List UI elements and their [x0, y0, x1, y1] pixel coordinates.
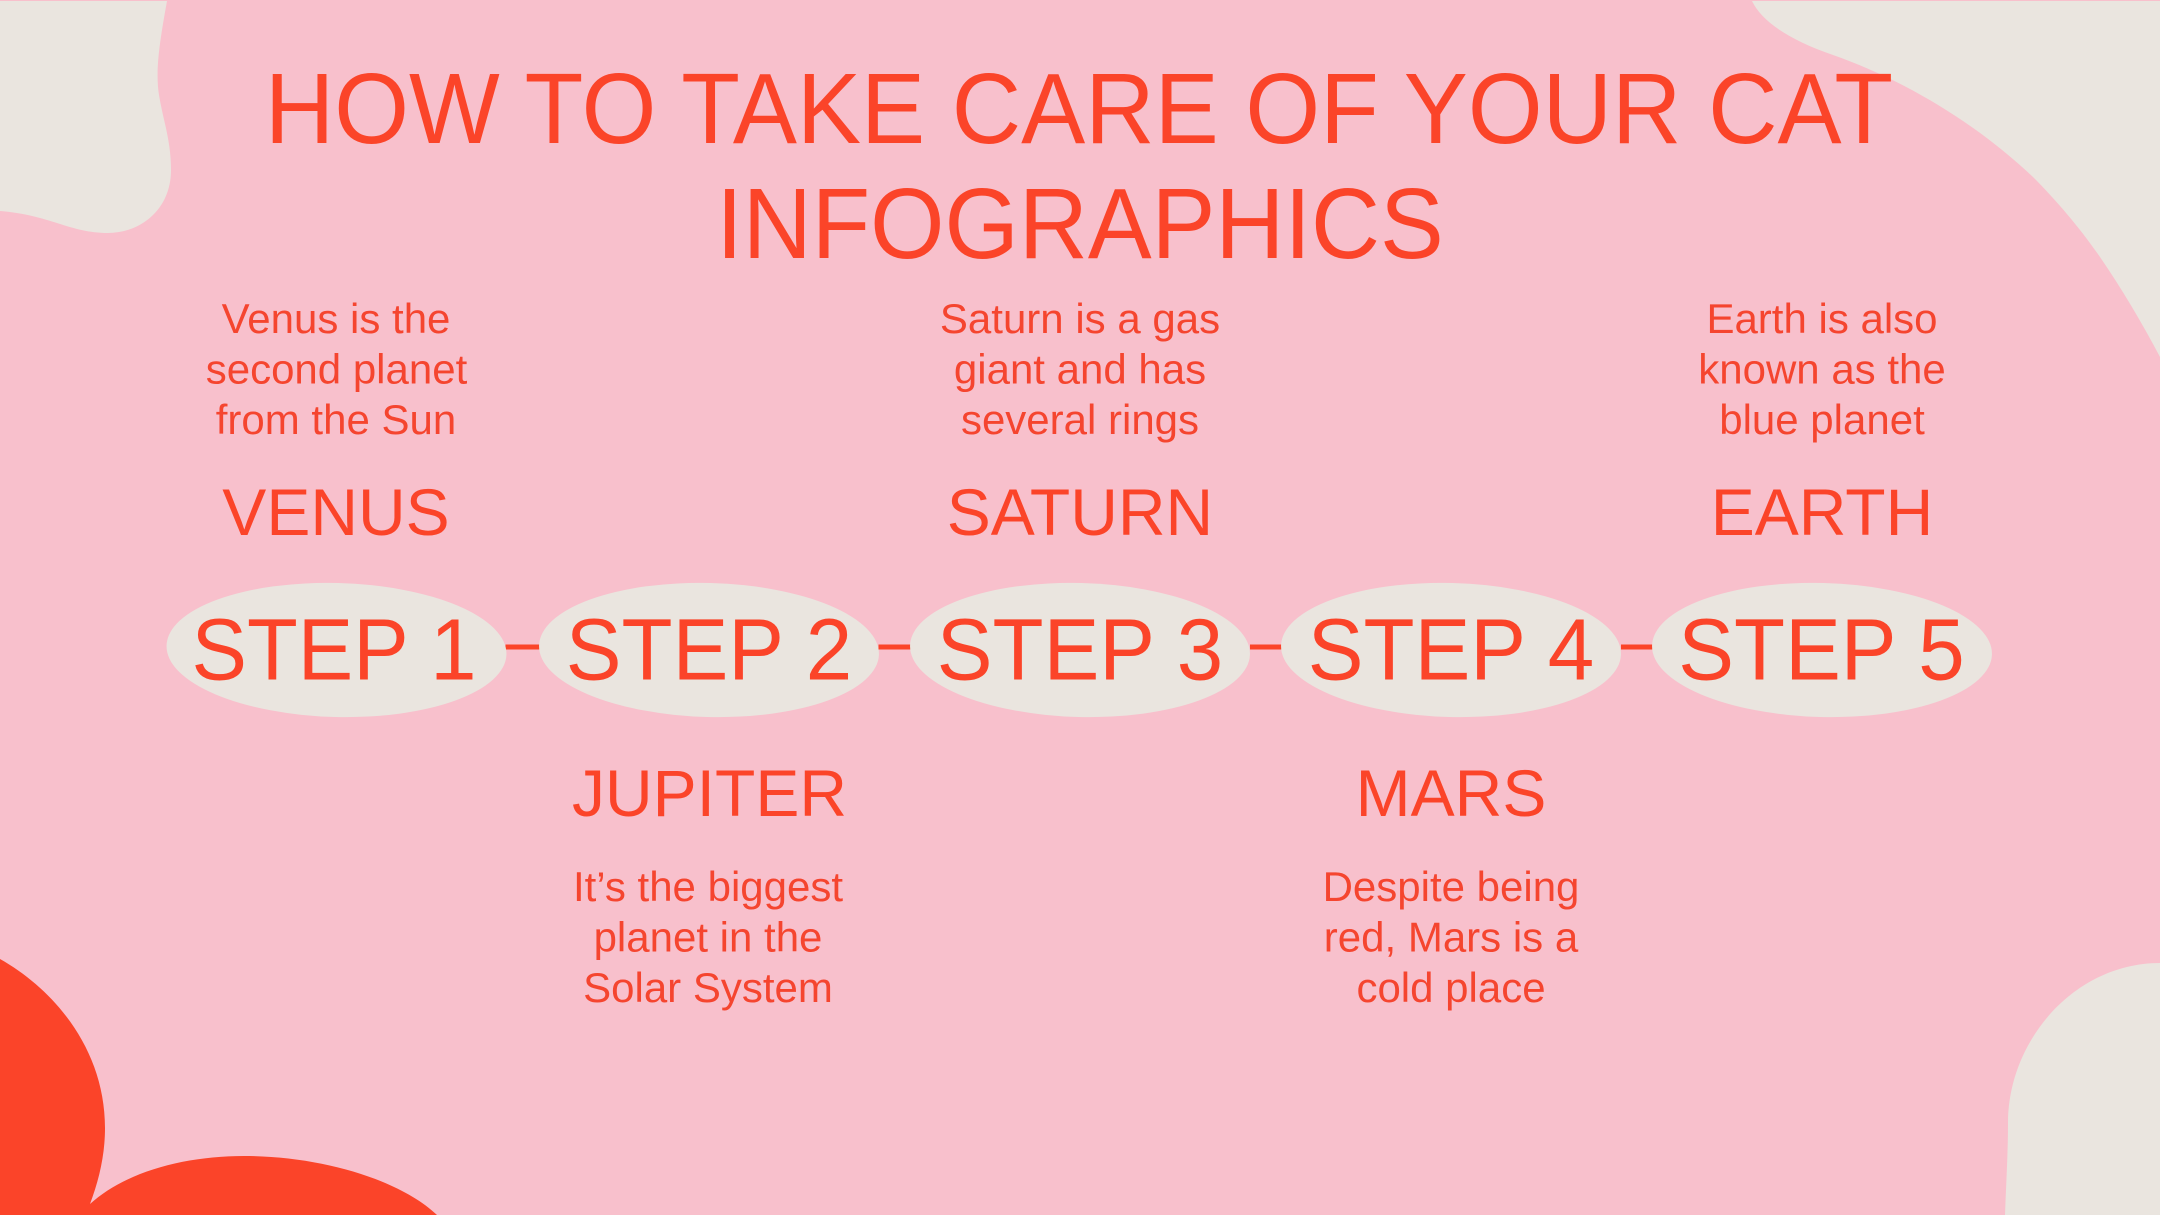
saturn description: [940, 295, 1220, 443]
title: INFOGRAPHICS: [716, 167, 1444, 279]
jupiter description: [573, 863, 843, 1011]
step 2 pill: [537, 579, 881, 721]
venus description: from the Sun: [216, 396, 456, 443]
jupiter description: It’s the biggest: [573, 863, 843, 910]
blob: bottom left red petals: [0, 959, 437, 1215]
step 5 pill: STEP 5: [1678, 602, 1965, 699]
blob: top left: [0, 1, 171, 233]
title: HOW TO TAKE CARE OF YOUR CAT: [265, 52, 1893, 164]
blob: bottom right: [2005, 963, 2160, 1215]
mars description: Despite being: [1323, 863, 1579, 910]
step 4 pill: [1279, 579, 1623, 721]
step 1 pill: [165, 579, 508, 721]
saturn description: giant and has: [954, 346, 1206, 392]
saturn heading: SATURN: [947, 475, 1213, 549]
jupiter description: planet in the: [594, 914, 822, 960]
earth description: blue planet: [1719, 396, 1925, 443]
step 1 pill: STEP 1: [192, 602, 476, 699]
saturn description: several rings: [961, 396, 1199, 443]
earth heading: EARTH: [1711, 475, 1933, 549]
jupiter description: Solar System: [583, 964, 833, 1011]
step 2 pill: STEP 2: [566, 602, 852, 699]
blob: top right: [1752, 1, 2160, 357]
mars heading: MARS: [1356, 756, 1546, 830]
saturn description: Saturn is a gas: [940, 295, 1220, 342]
step 5 pill: [1650, 579, 1994, 721]
connector: step 3 to 4: [1250, 644, 1283, 650]
step 3 pill: STEP 3: [937, 602, 1223, 699]
step 3 pill: [908, 579, 1252, 721]
venus heading: VENUS: [222, 475, 450, 549]
connector: step 2 to 3: [878, 644, 912, 650]
earth description: known as the: [1698, 346, 1946, 392]
earth description: [1698, 295, 1946, 443]
connector: step 1 to 2: [506, 644, 540, 650]
venus description: [206, 295, 468, 443]
title: [265, 52, 1893, 279]
earth description: Earth is also: [1706, 295, 1938, 342]
venus description: second planet: [206, 346, 468, 392]
mars description: red, Mars is a: [1324, 914, 1579, 960]
jupiter heading: JUPITER: [572, 756, 847, 830]
mars description: [1323, 863, 1579, 1011]
venus description: Venus is the: [222, 295, 450, 342]
mars description: cold place: [1356, 964, 1546, 1011]
step 4 pill: STEP 4: [1308, 602, 1594, 699]
connector: step 4 to 5: [1621, 644, 1653, 650]
